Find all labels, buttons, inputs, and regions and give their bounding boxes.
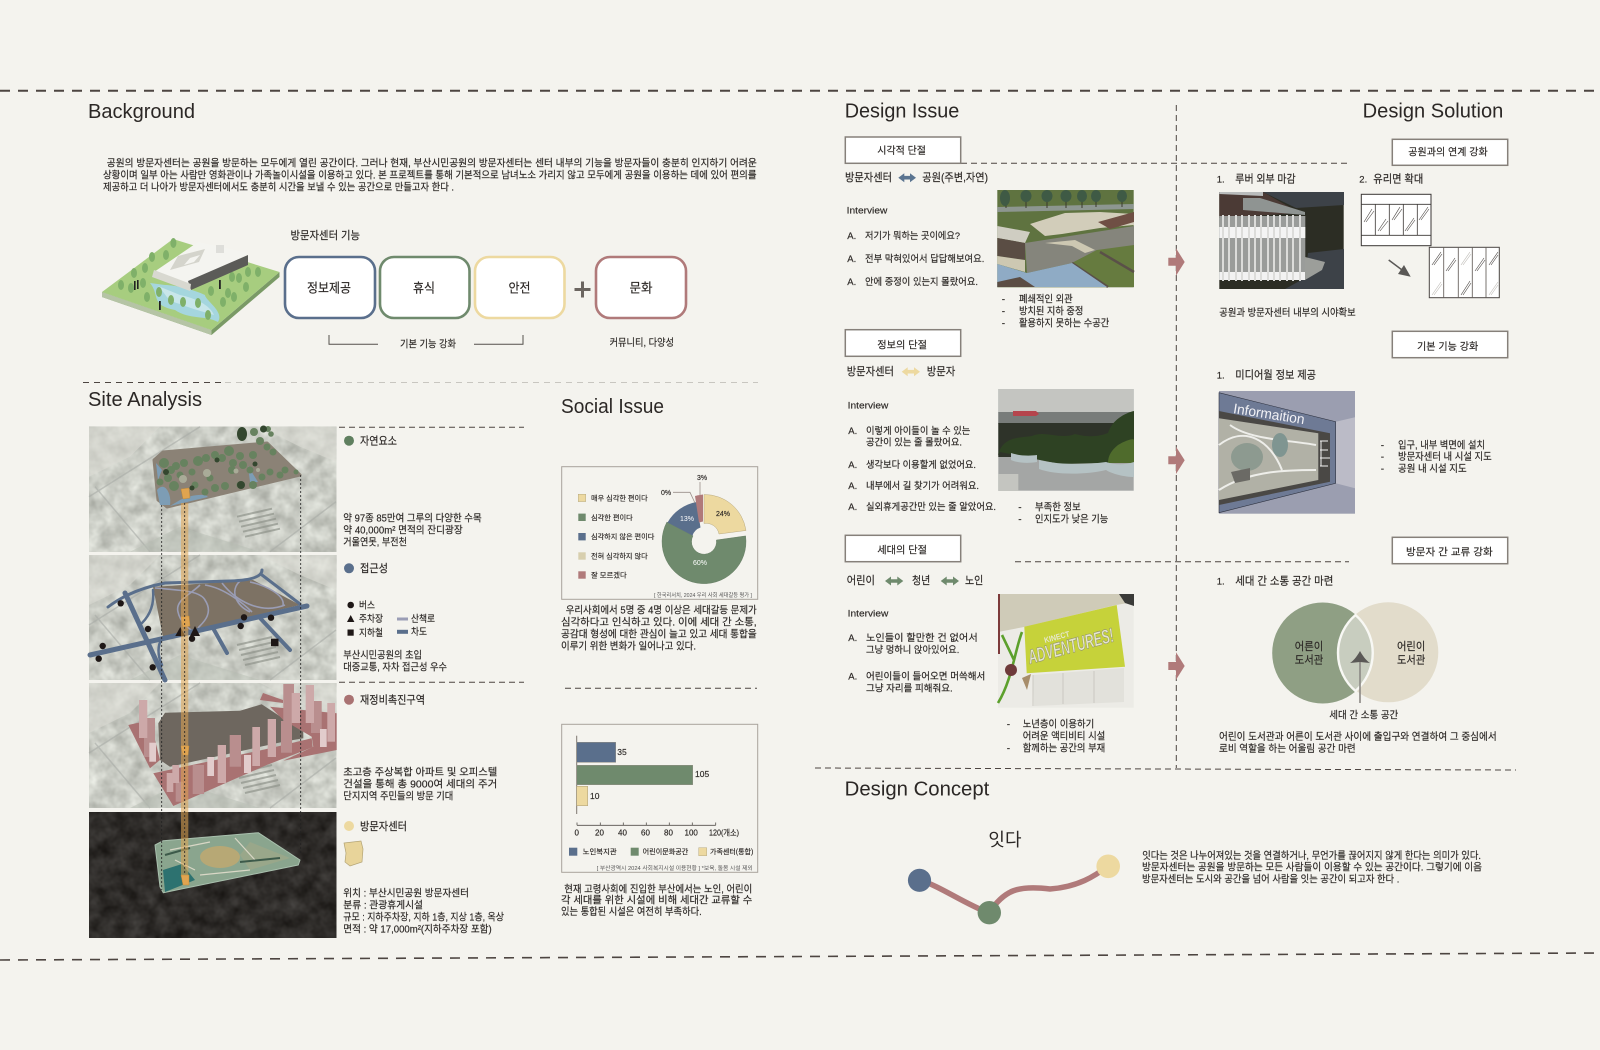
panel: background [88, 101, 757, 351]
interview 2 [848, 401, 996, 513]
bracket: basic function reinforcement [329, 335, 523, 351]
relation: center and visitor: 방문자센터 [847, 365, 894, 378]
legend text: accessibility: 지하철 [359, 627, 383, 639]
legend text: redevelopment [343, 694, 497, 803]
map layer: accessibility [89, 555, 336, 680]
marker: visitor center [181, 616, 190, 627]
interview 1: 안에 중정이 있는지 몰랐어요. [865, 276, 978, 288]
subheads: louver and glass [1217, 173, 1423, 186]
solution label: basic function: 기본 기능 강화 [1417, 341, 1478, 353]
subheads: louver and glass: 2. [1359, 175, 1367, 186]
legend text: accessibility: 접근성 [360, 562, 388, 575]
photo: game screen room: KINECT [1043, 629, 1071, 645]
text block: generation conflict: 우리사회에서 5명 중 4명 이상은 세대갈등 문제가 [566, 603, 757, 616]
chart: facilities bar chart: 20 [595, 829, 604, 838]
panel: design issue [845, 100, 1134, 755]
heading: Social Issue: Social Issue [561, 396, 664, 418]
legend text: redevelopment: 재정비촉진구역 [360, 694, 425, 707]
interview 3: Interview [848, 609, 888, 620]
text block: concept description: 방문자센터는 도시와 공간을 넘어 사람을 잇는 공간이 되고자 한다 . [1142, 873, 1399, 886]
bullets: issue 3: 노년층이 이용하기 [1023, 717, 1094, 730]
chart: facilities bar chart: 0 [574, 829, 580, 838]
chart: donut survey: [ 한국리서치, 2024 우리 사회 세대갈등 평가 ] [654, 591, 752, 599]
interview 2: A. [848, 481, 857, 492]
chart: facilities bar chart: 가족센터(통합) [710, 847, 753, 856]
relation: child youth senior: 청년 [912, 574, 930, 587]
interview 1: A. [847, 254, 856, 265]
marker: visitor center [181, 488, 190, 499]
box: culture [596, 257, 686, 318]
photo: louver facade rendering [1219, 192, 1344, 289]
legend text: nature: 약 40,000m² 면적의 잔디광장 [343, 525, 463, 537]
arrow: issue 3 to solution 3 [1168, 652, 1185, 680]
photo: game screen room: ADVENTURES! [1025, 625, 1116, 669]
bullets: issue 2: 부족한 정보 [1035, 502, 1081, 514]
chart: donut survey: 0% [661, 490, 671, 497]
subhead: media wall: 미디어월 정보 제공 [1235, 369, 1316, 382]
heading: Design Solution: Design Solution [1363, 100, 1503, 122]
bullets: issue 3 [1007, 717, 1105, 755]
issue label: visual disconnection [845, 137, 961, 163]
chart: donut survey: 잘 모르겠다 [591, 570, 627, 580]
subhead: media wall: 1. [1217, 371, 1225, 382]
legend text: visitor center [343, 820, 504, 936]
legend text: accessibility: 차도 [411, 626, 427, 638]
arrow: toward shared space [1350, 651, 1370, 703]
text block: shared lobby: 로비 역할을 하는 어울림 공간 마련 [1219, 742, 1356, 755]
bullets: media wall: - [1381, 452, 1384, 463]
bullets: issue 1: - [1002, 307, 1005, 318]
arrow: glazing expansion [1389, 260, 1411, 277]
diagram: connecting line with three nodes [908, 854, 1120, 924]
relation: center and park [845, 171, 988, 184]
photo: indoor garden lobby [998, 389, 1134, 491]
legend text: visitor center: 면적 : 약 17,000m²(지하주차장 포함) [343, 923, 492, 936]
illustration: isometric visitor center [102, 238, 280, 335]
interview 2: 공간이 있는 줄 몰랐어요. [866, 437, 962, 449]
solution label: park connection [1392, 139, 1508, 165]
chart: facilities bar chart: 어린이문화공간 [643, 847, 689, 856]
illustration: media wall [1219, 391, 1355, 514]
relation: center and visitor [847, 365, 955, 378]
solution label: visitor exchange [1392, 537, 1508, 564]
bullets: issue 1 [1002, 294, 1109, 330]
title: connect: 잇다 [988, 830, 1022, 850]
legend text: redevelopment: 단지지역 주민들의 방문 기대 [343, 791, 453, 803]
legend text: visitor center: 위치 : 부산시민공원 방문자센터 [343, 887, 469, 900]
interview 1 [847, 206, 984, 288]
text block: background description: 제공하고 더 나아가 방문자센터에서도 충분히 시간을 보낼 수 있는 공간으로 만들고자 한다 . [103, 181, 454, 194]
legend text: accessibility: 부산시민공원의 초입 [343, 649, 422, 662]
interview 1: A. [847, 231, 856, 242]
text block: concept description: 잇다는 것은 나누어져있는 것을 연결하거나, 무언가를 끊어지지 않게 한다는 의미가 있다. [1142, 849, 1481, 862]
text block: background description: 공원의 방문자센터는 공원을 방문하는 모두에게 열린 공간이다. 그러나 현재, 부산시민공원의 방문자센터는 센터 내부의 기능을 방문자들이 충분히 인지하기 어려운 [107, 157, 757, 170]
text block: facility shortage: 있는 통합된 시설은 여전히 부족하다. [561, 905, 702, 918]
issue label: generation disconnection: 세대의 단절 [877, 543, 927, 556]
bullets: issue 2: 인지도가 낮은 기능 [1035, 514, 1108, 526]
issue label: information disconnection [845, 330, 961, 356]
subheads: louver and glass: 유리면 확대 [1373, 173, 1423, 186]
panel: site analysis [88, 389, 504, 938]
photo: sunken courtyard exterior [997, 190, 1134, 287]
chart: donut survey: 전혀 심각하지 않다 [591, 552, 648, 560]
interview 2: 내부에서 길 찾기가 어려워요. [866, 480, 979, 492]
diagram: venn libraries: 어린이 [1397, 640, 1425, 653]
subheads: louver and glass: 루버 외부 마감 [1235, 173, 1296, 186]
chart: donut survey [562, 467, 758, 599]
heading: Background: Background [88, 101, 195, 123]
chart: donut survey: 심각하지 않은 편이다 [591, 532, 655, 541]
chart: donut survey: 3% [697, 475, 707, 482]
chart: facilities bar chart: 노인복지관 [583, 847, 617, 856]
bullets: issue 2: - [1018, 503, 1022, 514]
bullets: media wall: - [1381, 464, 1384, 475]
icon: plus [574, 282, 590, 298]
legend text: nature: 거울연못, 부전천 [343, 537, 407, 549]
legend text: nature: 약 97종 85만여 그루의 다양한 수목 [343, 513, 482, 525]
bullets: issue 3: 어려운 액티비티 시설 [1023, 731, 1105, 743]
diagram: venn libraries: 어른이 [1295, 640, 1323, 653]
marker: visitor center [181, 875, 189, 885]
bullets: issue 1: 활용하지 못하는 수공간 [1019, 317, 1109, 330]
subheads: louver and glass: 1. [1217, 175, 1225, 186]
box: rest [380, 257, 470, 318]
text block: shared lobby [1219, 730, 1497, 755]
chart: facilities bar chart: 10 [590, 791, 600, 801]
heading: Design Concept: Design Concept [845, 779, 990, 801]
diagram: venn libraries [1272, 602, 1438, 721]
text block: background description [103, 157, 757, 194]
subhead: intergenerational space: 1. [1217, 576, 1225, 587]
chart: donut survey: 60% [693, 560, 707, 567]
relation: center and park: 공원(주변,자연) [922, 171, 988, 184]
chart: facilities bar chart: 120(개소) [709, 828, 739, 838]
text block: shared lobby: 어린이 도서관과 어른이 도서관 사이에 출입구와 연결하여 그 중심에서 [1219, 730, 1497, 743]
text block: background description: 상황이며 일부 아는 사람만 영화관이나 가족놀이시설을 이용하고 있다. 본 프로젝트를 통해 기본적으로 남녀노소 가리지 않고 모두에게 공원을 이용하는 데에 있어 편의를 [103, 169, 756, 182]
text block: concept description [1142, 849, 1482, 886]
interview 3: 노인들이 할만한 건 없어서 [866, 632, 978, 644]
interview 3: A. [848, 672, 857, 683]
box: safety: 안전 [508, 281, 530, 296]
solution label: park connection: 공원과의 연계 강화 [1408, 147, 1488, 159]
bullets: issue 3: 함께하는 공간의 부재 [1023, 742, 1105, 755]
legend text: accessibility: 산책로 [411, 614, 435, 625]
solution label: basic function [1392, 331, 1508, 358]
subhead: intergenerational space: 세대 간 소통 공간 마련 [1235, 574, 1333, 587]
chart: facilities bar chart: 35 [617, 747, 627, 757]
chart: facilities bar chart: 60 [641, 829, 650, 838]
diagram: venn libraries: 도서관 [1397, 653, 1425, 666]
text block: generation conflict [561, 603, 757, 652]
text block: generation conflict: 공감대 형성에 대한 관심이 늘고 있고 세대 통합을 [561, 628, 757, 640]
interview 1: A. [847, 277, 856, 288]
text block: facility shortage: 현재 고령사회에 진입한 부산에서는 노인, 어린이 [564, 882, 752, 895]
bullets: issue 3: - [1007, 719, 1010, 730]
box: rest: 휴식 [413, 281, 435, 296]
photo: game screen room [998, 594, 1134, 708]
interview 1: 전부 막혀있어서 답답해보여요. [865, 253, 984, 265]
map layer: redevelopment zone [89, 683, 337, 808]
label: visitor center functions: 방문자센터 기능 [290, 229, 360, 242]
bracket: basic function reinforcement: 기본 기능 강화 [400, 339, 456, 351]
legend text: redevelopment: 건설을 통해 총 9000여 세대의 주거 [343, 778, 497, 791]
interview 3: 그냥 자리를 피해줘요. [866, 683, 953, 695]
chart: facilities bar chart: 100 [684, 829, 698, 838]
interview 2: 실외휴게공간만 있는 줄 알았어요. [866, 501, 996, 513]
interview 3 [848, 609, 985, 695]
interview 2: 이렇게 아이들이 놀 수 있는 [866, 425, 971, 437]
arrow: issue 1 to solution 1 [1168, 248, 1185, 276]
legend text: visitor center: 분류 : 관광휴게시설 [343, 900, 423, 912]
bullets: media wall: 방문자센터 내 시설 지도 [1398, 451, 1492, 463]
bullets: issue 1: 폐쇄적인 외관 [1019, 294, 1073, 306]
diagram: venn libraries: 도서관 [1295, 653, 1323, 666]
bullets: media wall: 입구, 내부 벽면에 설치 [1398, 438, 1485, 451]
chart: facilities bar chart: [ 부산광역시 2024 사회복지시설 이용현황 ] *보육, 돌봄 시설 제외 [597, 864, 753, 872]
box: information: 정보제공 [307, 281, 351, 296]
connector: orange column and dotted guides [162, 475, 301, 890]
diagram: glazing after [1429, 247, 1499, 298]
legend text: redevelopment: 초고층 주상복합 아파트 및 오피스텔 [343, 767, 497, 779]
text block: facility shortage: 각 세대를 위한 시설에 비해 세대간 교류할 수 [561, 893, 752, 906]
chart: donut survey: 24% [716, 511, 730, 518]
interview 2: A. [848, 426, 857, 437]
bullets: issue 2 [1018, 502, 1108, 526]
bullets: issue 1: 방치된 지하 중정 [1019, 305, 1083, 318]
legend text: nature: 자연요소 [360, 434, 397, 447]
illustration: media wall: Informaition [1232, 400, 1306, 427]
solution label: visitor exchange: 방문자 간 교류 강화 [1406, 547, 1493, 559]
box: safety [475, 257, 564, 318]
panel: social issue [561, 396, 758, 918]
relation: center and park: 방문자센터 [845, 171, 892, 184]
chart: donut survey: 13% [680, 516, 694, 523]
issue label: visual disconnection: 시각적 단절 [877, 144, 926, 157]
interview 1: Interview [847, 206, 887, 217]
interview 2: A. [848, 460, 857, 471]
interview 3: 어린이들이 들어오면 머쓱해서 [866, 671, 985, 683]
chart: donut survey: 심각한 편이다 [591, 513, 633, 522]
relation: child youth senior: 노인 [965, 574, 983, 587]
legend text: accessibility: 대중교통, 자차 접근성 우수 [343, 662, 447, 674]
chart: facilities bar chart: 80 [664, 829, 673, 838]
box: information [285, 257, 375, 318]
bullets: issue 1: - [1002, 319, 1005, 330]
panel: design concept [845, 779, 1482, 924]
interview 2: 생각보다 이용할게 없었어요. [866, 459, 976, 471]
relation: center and visitor: 방문자 [927, 365, 955, 378]
box: culture: 문화 [630, 281, 653, 296]
diagram: glazing before [1361, 194, 1431, 246]
interview 3: A. [848, 633, 857, 644]
arrow: issue 2 to solution 2 [1168, 447, 1185, 474]
text block: generation conflict: 이루기 위한 변화가 일어나고 있다. [561, 639, 696, 652]
caption: louver: 공원과 방문자센터 내부의 시야확보 [1219, 307, 1356, 319]
text block: generation conflict: 심각하다고 인식하고 있다. 이에 세대 간 소통, [561, 615, 757, 628]
legend text: accessibility: 버스 [359, 601, 375, 612]
interview 3: 그냥 멍하니 앉아있어요. [866, 644, 959, 656]
issue label: information disconnection: 정보의 단절 [877, 338, 927, 351]
issue label: generation disconnection [845, 535, 961, 562]
interview 2: Interview [848, 401, 888, 412]
text block: concept description: 방문자센터는 공원을 방문하는 모든 사람들이 이용할 수 있는 공간이다. 그렇기에 이음 [1142, 861, 1482, 874]
chart: facilities bar chart: 40 [618, 829, 627, 838]
relation: child youth senior [847, 574, 983, 587]
label: community diversity: 커뮤니티, 다양성 [610, 337, 674, 349]
legend text: accessibility: 주차장 [359, 613, 383, 625]
interview 1: 저기가 뭐하는 곳이에요? [865, 230, 960, 242]
heading: Design Issue: Design Issue [845, 100, 959, 122]
interview 2: A. [848, 502, 857, 513]
chart: facilities bar chart [562, 724, 758, 872]
chart: facilities bar chart: 105 [695, 769, 709, 779]
bullets: issue 2: - [1018, 515, 1022, 526]
legend text: visitor center: 규모 : 지하주차장, 지하 1층, 지상 1층, 옥상 [343, 911, 504, 924]
bullets: media wall: - [1381, 440, 1384, 451]
chart: donut survey: 매우 심각한 편이다 [591, 494, 648, 502]
bullets: issue 3: - [1007, 744, 1010, 755]
map layer: visitor center location [89, 812, 336, 938]
panel: design solution [1217, 100, 1508, 755]
bullets: media wall: 공원 내 시설 지도 [1398, 463, 1467, 475]
marker: visitor center [181, 746, 189, 755]
legend text: accessibility [343, 562, 447, 674]
map layer: nature [89, 426, 336, 552]
bullets: media wall [1381, 438, 1492, 475]
legend text: visitor center: 방문자센터 [360, 820, 407, 833]
diagram: venn libraries: 세대 간 소통 공간 [1329, 709, 1398, 721]
bullets: issue 1: - [1002, 295, 1005, 306]
relation: child youth senior: 어린이 [847, 574, 875, 587]
heading: Site Analysis: Site Analysis [88, 389, 202, 411]
text block: facility shortage [561, 882, 752, 918]
legend text: nature [343, 434, 482, 549]
